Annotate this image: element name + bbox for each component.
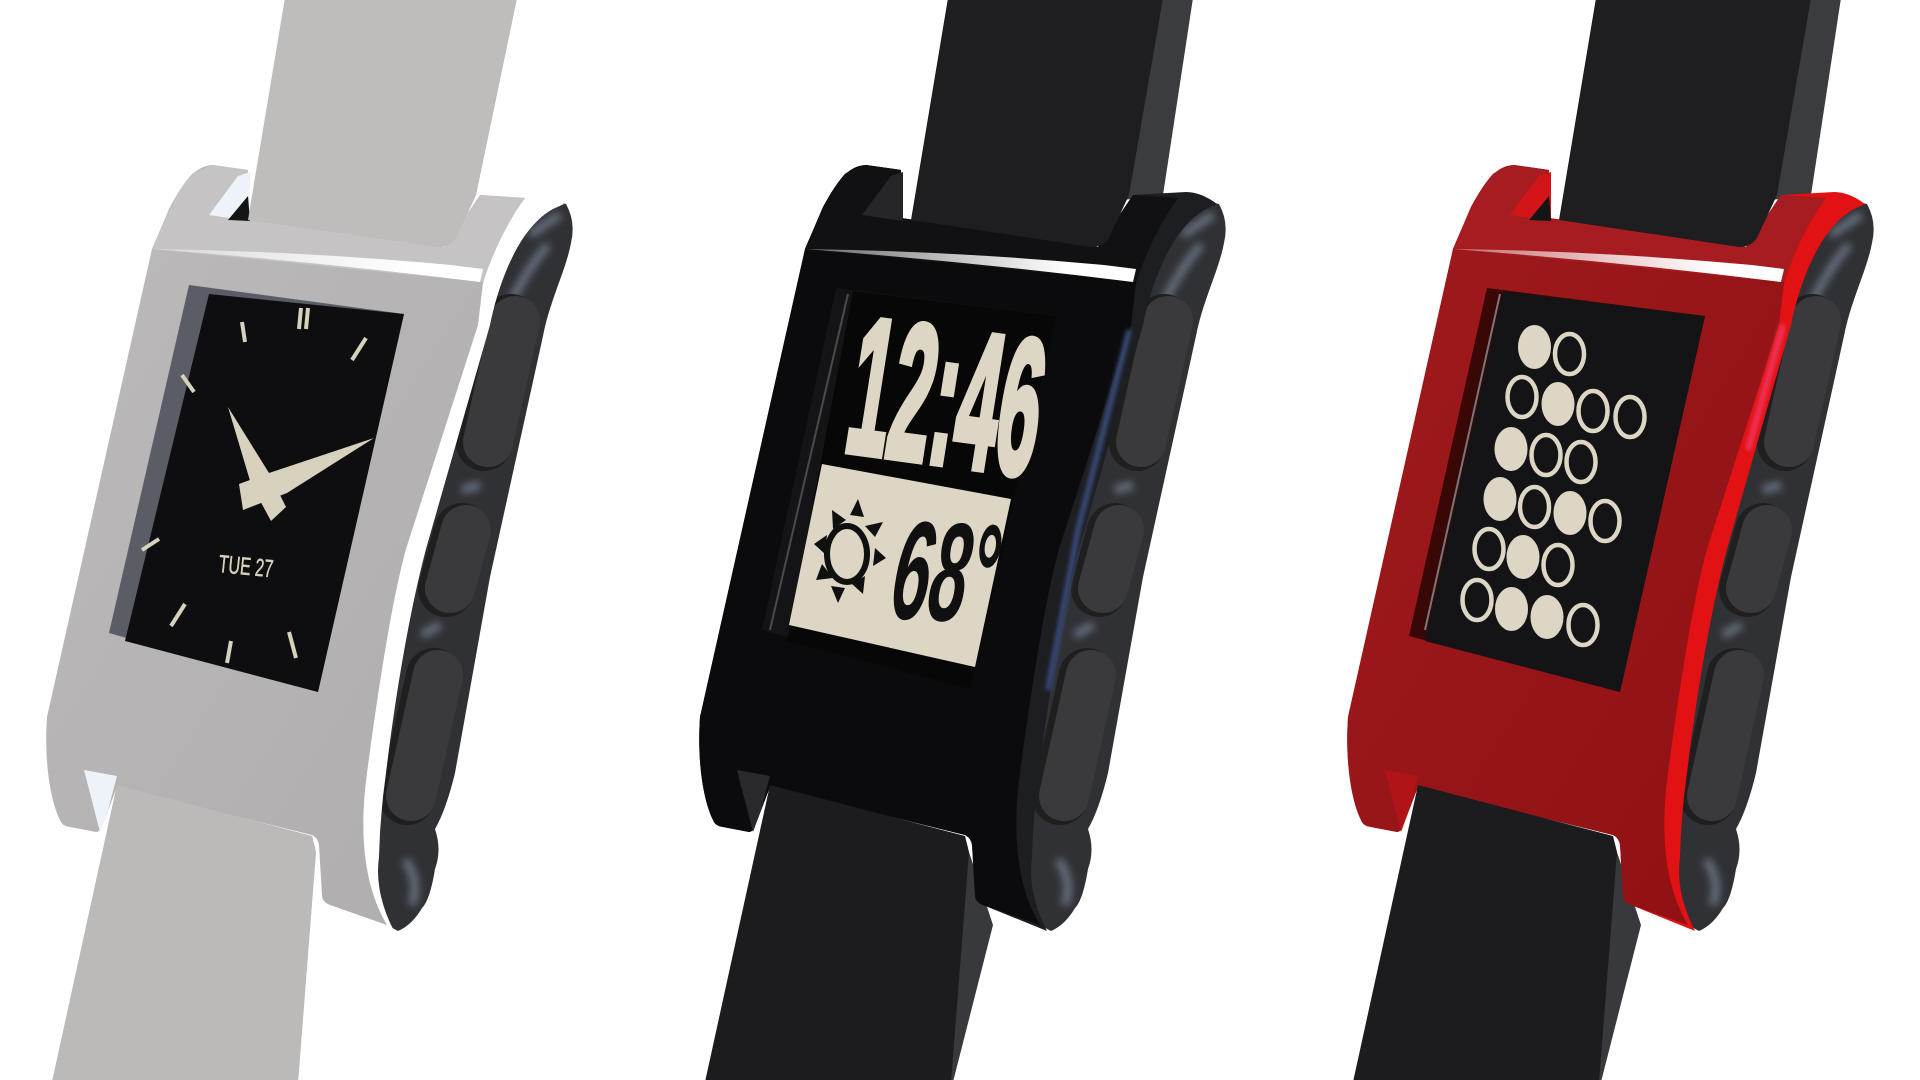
glossy highlight: [152, 249, 483, 282]
hour markers: [142, 308, 366, 663]
time readout: 12:46: [835, 278, 1058, 517]
weather panel: [789, 464, 1011, 667]
e-paper screen: [762, 278, 1058, 689]
binary dots screen: [1409, 288, 1705, 692]
filled dots: [1484, 325, 1586, 639]
date label: TUE 27: [217, 551, 274, 583]
watch body rim: [46, 165, 564, 931]
watch face plate: [699, 165, 1178, 925]
glossy highlight: [805, 249, 1136, 282]
red watch: [1347, 0, 1874, 1080]
straps: [1559, 0, 1811, 247]
watch face plate: [1347, 165, 1826, 925]
strap side pieces: [1571, 0, 1841, 1080]
icon: sun: [814, 499, 886, 603]
watch body rim: [1347, 165, 1865, 931]
strap side pieces: [923, 0, 1193, 1080]
side casing with buttons: [1641, 200, 1874, 931]
bottom slot: [1385, 770, 1418, 832]
watch body rim: [699, 165, 1217, 931]
pink rim reflection: [1748, 325, 1783, 450]
white strap bottom: [52, 785, 316, 1080]
strap over slot: [248, 0, 517, 247]
top slot: [1510, 172, 1551, 221]
clock hands: [228, 407, 374, 521]
bottom slot: [84, 770, 117, 832]
glossy highlight: [1453, 249, 1784, 282]
straps: [911, 0, 1163, 247]
white watch: [46, 0, 573, 1080]
bottom slot: [737, 770, 770, 832]
outlined dots: [1462, 334, 1644, 645]
top slot: [209, 172, 250, 221]
side casing with buttons: [340, 200, 573, 931]
white strap top: [248, 0, 517, 247]
temperature readout: 68°: [883, 492, 1008, 653]
analog screen: [109, 285, 404, 692]
side casing with buttons: [993, 200, 1226, 931]
watch face plate: [46, 165, 525, 925]
blue rim reflection: [1048, 330, 1129, 690]
top slot: [862, 172, 903, 221]
black watch: [699, 0, 1226, 1080]
